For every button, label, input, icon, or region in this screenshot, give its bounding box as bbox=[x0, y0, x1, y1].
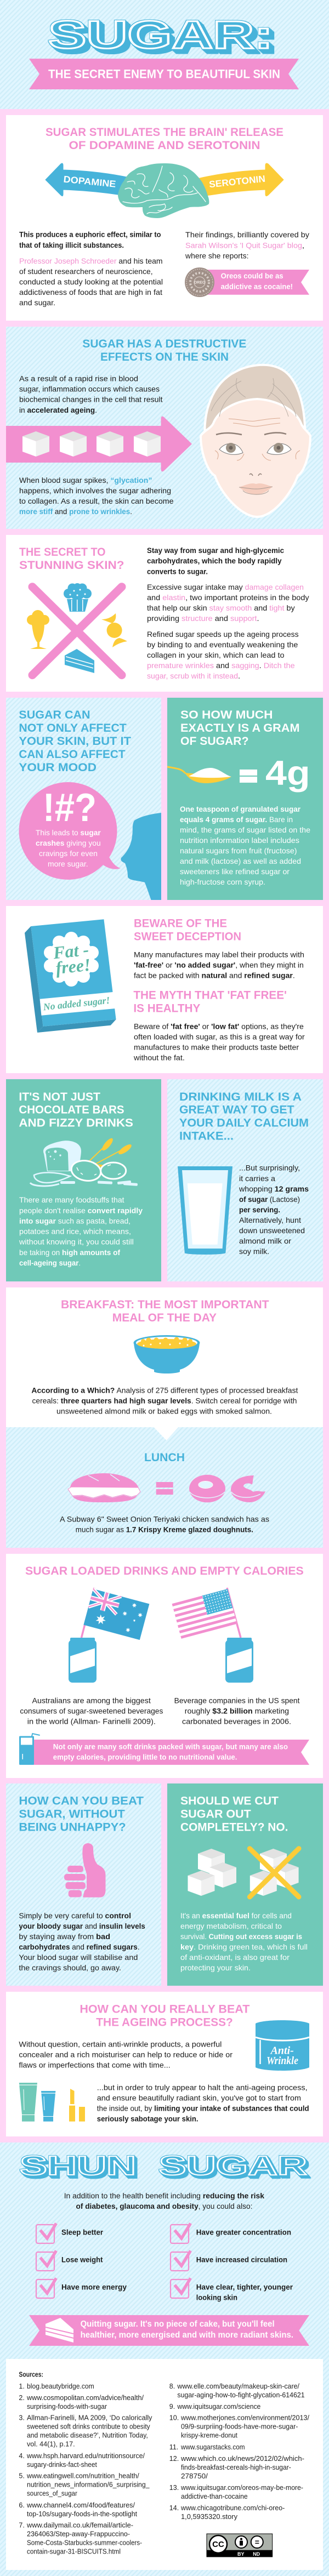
text block: beverage companies: Beverage companies in the US spent bbox=[174, 1696, 300, 1705]
panel: brain release bbox=[6, 115, 323, 321]
heading: CAN ALSO AFFECT bbox=[19, 748, 126, 761]
heading: YOUR SKIN, BUT IT bbox=[19, 735, 131, 748]
badge: creative commons bbox=[207, 2534, 273, 2557]
list: sources right: 12. bbox=[169, 2455, 179, 2463]
text block bbox=[19, 1911, 145, 1972]
callout: oreos: addictive as cocaine! bbox=[221, 282, 293, 291]
text block: fact be packed with natural and refined sugar. bbox=[134, 971, 295, 980]
heading: GREAT WAY TO GET bbox=[179, 1104, 294, 1116]
list: sources left: top-10s/sugary-foods-in-the-spotlight bbox=[27, 2510, 138, 2518]
heading: OF DOPAMINE AND SEROTONIN bbox=[69, 139, 260, 152]
heading: SHOULD WE CUT bbox=[180, 1794, 279, 1807]
heading: MEAL OF THE DAY bbox=[112, 1312, 217, 1324]
list: sources left: www.eatingwell.com/nutrition_health/ bbox=[26, 2472, 139, 2480]
list: sources left: 6. bbox=[19, 2501, 25, 2509]
text block: left: addictiveness of foods that are high in fat bbox=[19, 288, 162, 297]
icon: fat free box: Fat - bbox=[52, 939, 90, 962]
text block bbox=[97, 2083, 309, 2123]
text block: collagen in your skin, which can lead to bbox=[147, 651, 285, 659]
panel: drinking milk bbox=[167, 1079, 323, 1281]
text block: beverage companies bbox=[174, 1696, 300, 1725]
heading bbox=[133, 989, 287, 1015]
checklist: right bbox=[171, 2223, 293, 2302]
list: sources left: 2. bbox=[19, 2394, 25, 2402]
icon: spoon of sugar bbox=[167, 767, 231, 783]
text block: to collagen. As a result, the skin can become bbox=[19, 497, 174, 505]
text block: beverage companies: carbonated beverages in 2006. bbox=[182, 1717, 291, 1725]
text block: the inside out, by limiting your intake of substances that could bbox=[97, 2104, 309, 2113]
callout: oreos: OREO bbox=[194, 281, 206, 285]
text block: carbohydrates, which the body rapidly bbox=[147, 556, 282, 565]
panel: gram of sugar bbox=[167, 698, 323, 900]
text block bbox=[239, 1164, 309, 1256]
icon: sugar cubes bbox=[188, 1849, 236, 1896]
banner: quitting sugar: healthier, more energised and with more radiant skins. bbox=[81, 2330, 293, 2340]
heading bbox=[46, 126, 283, 152]
text block: left: Professor Joseph Schroeder and his team bbox=[19, 257, 163, 265]
list: sources right: 09/9-surpriing-foods-have-more-sugar- bbox=[181, 2423, 298, 2431]
text block bbox=[180, 805, 310, 886]
text block: carbohydrates and refined sugars. bbox=[19, 1942, 140, 1951]
text block bbox=[19, 1195, 143, 1267]
panel: mood bbox=[6, 698, 161, 900]
heading: IT'S NOT JUST bbox=[19, 1091, 100, 1103]
text block bbox=[133, 1022, 305, 1062]
text block: in accelerated ageing. bbox=[19, 406, 97, 414]
heading bbox=[19, 1794, 144, 1833]
text block: nutrition information label includes bbox=[180, 836, 299, 845]
arrow: serotonin: SEROTONIN bbox=[208, 174, 266, 190]
list: sources right: sugar-aging-how-to-fight-glycation-614621 bbox=[177, 2391, 305, 2399]
list: sources left: 3. bbox=[19, 2414, 25, 2422]
heading: EXACTLY IS A GRAM bbox=[180, 722, 299, 734]
heading: COMPLETELY? NO. bbox=[180, 1821, 288, 1833]
list: sources left: www.hsph.harvard.edu/nutritionsource/ bbox=[26, 2452, 145, 2460]
text block: of sugar (Lactose) bbox=[239, 1195, 300, 1204]
banner: subtitle: THE SECRET ENEMY TO BEAUTIFUL SKIN bbox=[48, 67, 280, 81]
text block: premature wrinkles and sagging. Ditch the bbox=[147, 661, 295, 670]
arrow: serotonin bbox=[197, 163, 283, 196]
checklist: left bbox=[36, 2223, 127, 2298]
icon: bread, potatoes and pasta bbox=[30, 1137, 138, 1186]
text block: sugar, inflammation occurs which causes bbox=[19, 385, 160, 394]
text block: left: conducted a study looking at the potential bbox=[19, 277, 163, 286]
list: sources right: finds-breakfast-cereals-high-in-sugar- bbox=[181, 2464, 291, 2471]
list: sources left: 4. bbox=[19, 2452, 25, 2460]
text block: unsweetened almond milk or baked eggs with smoked salmon. bbox=[56, 1407, 272, 1416]
list: sources left: sugary-drinks-fact-sheet bbox=[27, 2461, 97, 2469]
icon: crossed out sweets bbox=[27, 583, 127, 675]
list: sources right: www.sugarstacks.com bbox=[180, 2443, 245, 2451]
icon: crossed sugar cubes bbox=[249, 1849, 299, 1897]
callout: oreos bbox=[185, 267, 309, 297]
text block: sugar, scrub with it instead. bbox=[147, 671, 240, 680]
text block: per serving. bbox=[239, 1205, 280, 1214]
list: sources right bbox=[169, 2383, 310, 2521]
text block: be taking on high amounts of bbox=[19, 1248, 120, 1257]
section: shun sugar bbox=[20, 2151, 309, 2346]
list: sources right: www.chicagotribune.com/chi-oreo- bbox=[180, 2504, 285, 2512]
list: sources left: surprising-foods-with-sugar bbox=[27, 2403, 107, 2410]
heading: LUNCH bbox=[144, 1451, 185, 1464]
text block: Simply be very careful to control bbox=[19, 1911, 131, 1920]
list: sources left: www.cosmopolitan.com/advice/health/ bbox=[26, 2394, 144, 2402]
heading: SUGAR LOADED DRINKS AND EMPTY CALORIES bbox=[25, 1565, 304, 1577]
arrow: dopamine: DOPAMINE bbox=[63, 174, 116, 190]
list: sources right: 9. bbox=[169, 2403, 175, 2410]
heading: BEWARE OF THE bbox=[134, 917, 227, 930]
speech bubble bbox=[19, 782, 121, 880]
text block: much sugar as 1.7 Krispy Kreme glazed doughnuts. bbox=[76, 1525, 253, 1534]
heading: HOW CAN YOU REALLY BEAT bbox=[80, 2003, 250, 2015]
callout: empty calories bbox=[19, 1734, 309, 1765]
text block: Australians bbox=[20, 1696, 163, 1725]
banner: quitting sugar bbox=[29, 2315, 309, 2346]
list: sources left: Allman-Farinelli, MA 2009, ‘Do calorically bbox=[27, 2414, 152, 2422]
badge: creative commons: ND bbox=[253, 2551, 260, 2557]
text block: Australians: consumers of sugar-sweetened beverages bbox=[20, 1706, 163, 1715]
heading bbox=[82, 338, 246, 363]
icon: sandwich bbox=[68, 1473, 140, 1502]
text block: Without question, certain anti-wrinkle products, a powerful bbox=[19, 2039, 222, 2048]
list: sources right: www.iquitsugar.com/oreos-may-be-more- bbox=[180, 2484, 303, 2492]
icon: fat free box: free! bbox=[55, 955, 92, 978]
list: sources left: Some-Costa-Starbucks-summer-coolers- bbox=[27, 2539, 142, 2547]
panel: not just chocolate bbox=[6, 1079, 161, 1281]
banner: subtitle bbox=[29, 59, 299, 89]
checklist: left: Have more energy bbox=[61, 2283, 127, 2292]
text block: by staying away from bad bbox=[19, 1932, 110, 1941]
icon: can with US flag bbox=[172, 1588, 253, 1683]
text block: left bbox=[19, 230, 163, 307]
list: sources left: 5. bbox=[19, 2472, 25, 2480]
text block: natural sugars from fruit (fructose) bbox=[180, 846, 297, 855]
list: sources left: nutrition_news_information/6_surprising_ bbox=[27, 2481, 150, 2489]
heading: SUGAR OUT bbox=[180, 1808, 251, 1820]
text block bbox=[31, 1386, 298, 1416]
heading: YOUR MOOD bbox=[19, 761, 97, 774]
heading: SUGAR STIMULATES THE BRAIN' RELEASE bbox=[46, 126, 283, 139]
text block bbox=[19, 374, 163, 414]
speech bubble: This leads to sugar bbox=[36, 828, 101, 837]
heading: THE MYTH THAT 'FAT FREE' bbox=[133, 989, 287, 1002]
heading bbox=[19, 1091, 133, 1130]
checklist: right: Have increased circulation bbox=[196, 2255, 287, 2264]
text block bbox=[147, 546, 309, 680]
text block: A Subway 6" Sweet Onion Teriyaki chicken sandwich has as bbox=[60, 1515, 269, 1524]
list: sources right: 13. bbox=[169, 2484, 179, 2492]
heading: BEING UNHAPPY? bbox=[19, 1821, 126, 1833]
text block: key. Drinking green tea, which is full bbox=[180, 1942, 308, 1951]
callout: empty calories: Not only are many soft drinks packed with sugar, but many are also bbox=[53, 1742, 288, 1751]
heading: INTAKE... bbox=[179, 1130, 234, 1143]
icon: fat free box: No added sugar! bbox=[42, 995, 110, 1012]
list: sources left: blog.beautybridge.com bbox=[27, 2383, 94, 2390]
text block: and elastin, two important proteins in the body bbox=[147, 593, 309, 602]
icon: can with Australian flag bbox=[69, 1588, 149, 1683]
list: sources left: 2364063/Step-away-Frappuccino- bbox=[27, 2531, 130, 2538]
text block: Many manufactures may label their products with bbox=[134, 950, 304, 959]
text block: potatoes and rice, which means, bbox=[19, 1227, 131, 1236]
heading: OF SUGAR? bbox=[180, 735, 249, 748]
arrow: dopamine bbox=[46, 163, 129, 196]
speech bubble: crashes giving you bbox=[36, 839, 101, 847]
panel: beat sugar bbox=[6, 1783, 161, 1986]
text block: often loaded with sugar, as this is a great way for bbox=[134, 1033, 305, 1041]
text block: Your blood sugar will stabilise and bbox=[19, 1953, 138, 1962]
text block: right: Sarah Wilson's 'I Quit Sugar' blog , bbox=[185, 241, 304, 250]
icon: thumbs up bbox=[64, 1843, 105, 1897]
text block: left: This produces a euphoric effect, similar to bbox=[19, 230, 161, 239]
text block: high-fructose corn syrup. bbox=[180, 877, 265, 886]
heading: DRINKING MILK IS A bbox=[179, 1091, 302, 1103]
speech bubble: !#? bbox=[43, 786, 97, 830]
title: SHUN SUGAR bbox=[20, 2151, 307, 2181]
heading: NOT ONLY AFFECT bbox=[19, 722, 127, 734]
text block: your bloody sugar and insulin levels bbox=[19, 1922, 145, 1930]
text block: equals 4 grams of sugar. Bare in bbox=[180, 815, 293, 824]
equals bbox=[156, 1482, 173, 1495]
text block: of anti-oxidant, is also great for bbox=[180, 1953, 290, 1962]
text block: without the fat. bbox=[133, 1053, 185, 1062]
stat: 4g: 4g bbox=[265, 754, 310, 793]
text block bbox=[64, 2191, 264, 2210]
heading bbox=[80, 2003, 250, 2028]
text block: down unsweetened bbox=[239, 1226, 305, 1235]
heading: SUGAR CAN bbox=[19, 709, 90, 721]
text block: mind, the grams of sugar listed on the bbox=[180, 825, 310, 834]
text block: converts to sugar. bbox=[147, 567, 208, 576]
heading: SUGAR HAS A DESTRUCTIVE bbox=[82, 338, 246, 350]
text block bbox=[19, 2039, 232, 2069]
text block: right: Their findings, brilliantly covered by bbox=[185, 230, 309, 239]
text block: beverage companies: roughly $3.2 billion marketing bbox=[185, 1706, 289, 1715]
text block: Beware of 'fat free' or 'low fat' options, as they're bbox=[134, 1022, 304, 1031]
icon: glass of milk bbox=[178, 1166, 232, 1255]
text block: concealer and a rich moisturiser can help to reduce or hide or bbox=[19, 2050, 232, 2059]
panel: stunning skin bbox=[6, 535, 323, 692]
heading: CHOCOLATE BARS bbox=[19, 1104, 124, 1116]
heading bbox=[179, 1091, 309, 1143]
panel: lunch bbox=[6, 1427, 323, 1548]
text block: happens, which involves the sugar adhering bbox=[19, 486, 171, 495]
heading bbox=[180, 709, 299, 748]
icon: cosmetic tubes bbox=[19, 2083, 85, 2122]
heading: SWEET DECEPTION bbox=[134, 931, 241, 943]
text block: Alternatively, hunt bbox=[239, 1216, 301, 1224]
text block: right bbox=[185, 230, 309, 260]
list: sources left: contain-sugar-31-BISCUITS.html bbox=[27, 2548, 121, 2556]
text block: right: where she reports: bbox=[185, 252, 249, 260]
heading bbox=[19, 546, 124, 572]
heading: THE AGEING PROCESS? bbox=[96, 2016, 233, 2028]
text block: According to a Which? Analysis of 275 different types of processed breakfast bbox=[31, 1386, 298, 1395]
text block: the cravings should, go away. bbox=[19, 1963, 121, 1972]
text block: Refined sugar speeds up the ageing process bbox=[147, 630, 299, 639]
text block: Australians: in the world (Allman- Farinelli 2009). bbox=[27, 1717, 156, 1725]
heading: YOUR DAILY CALCIUM bbox=[179, 1117, 309, 1130]
list: sources left: www.dailymail.co.uk/femail/article- bbox=[26, 2522, 133, 2529]
badge: creative commons: = bbox=[255, 2538, 259, 2546]
panel: breakfast bbox=[6, 1287, 323, 1427]
heading: EFFECTS ON THE SKIN bbox=[100, 351, 229, 363]
list: sources left: sweetened soft drinks contribute to obesity bbox=[27, 2423, 150, 2431]
list: sources right: 1,0,5935320.story bbox=[181, 2513, 238, 2521]
illustration: ageing face bbox=[201, 365, 310, 517]
text block: Australians: Australians are among the biggest bbox=[32, 1696, 151, 1705]
list: sources right: 10. bbox=[169, 2414, 179, 2422]
text block: There are many foodstuffs that bbox=[19, 1195, 124, 1204]
checklist: right: looking skin bbox=[196, 2293, 237, 2302]
text block: of diabetes, glaucoma and obesity, you could also: bbox=[76, 2202, 252, 2210]
heading: STUNNING SKIN? bbox=[19, 559, 124, 572]
list: sources left: 1. bbox=[19, 2383, 25, 2390]
list: sources right: 14. bbox=[169, 2504, 179, 2512]
heading: AND FIZZY DRINKS bbox=[19, 1117, 133, 1130]
heading: SUGAR, WITHOUT bbox=[19, 1808, 125, 1820]
text block: whopping 12 grams bbox=[239, 1184, 309, 1193]
list: sources right: www.iquitsugar.com/science bbox=[177, 2403, 260, 2410]
list: sources left: vol. 44(1), p.17. bbox=[27, 2441, 75, 2448]
text block: providing structure and support. bbox=[147, 614, 259, 623]
list: sources right: www.which.co.uk/news/2012/02/which- bbox=[180, 2455, 304, 2463]
text block: without knowing it, you could still bbox=[19, 1238, 134, 1246]
text block bbox=[180, 1911, 308, 1972]
list: sources right: krispy-kreme-donut bbox=[181, 2432, 237, 2440]
list: sources right: addictive-than-cocaine bbox=[181, 2493, 248, 2500]
text block: seriously sabotage your skin. bbox=[97, 2115, 198, 2123]
icon: doughnuts bbox=[189, 1475, 265, 1502]
text block: In addition to the health benefit including reducing the risk bbox=[64, 2191, 264, 2200]
checklist: left: Lose weight bbox=[61, 2255, 103, 2264]
list: sources left: and metabolic disease?’, Nutrition Today, bbox=[27, 2432, 148, 2440]
heading: SO HOW MUCH bbox=[180, 709, 273, 721]
list: sources right: www.elle.com/beauty/makeup-skin-care/ bbox=[177, 2383, 300, 2390]
text block bbox=[60, 1515, 269, 1534]
panel: sweet deception bbox=[6, 906, 323, 1073]
text block: manufactures to make their products taste better bbox=[134, 1043, 299, 1052]
list: sources right: 11. bbox=[169, 2443, 178, 2451]
text block: sweeteners like refined sugar or bbox=[180, 867, 290, 876]
panel: destructive effects bbox=[6, 327, 323, 529]
heading bbox=[180, 1794, 288, 1833]
text block: almond milk or bbox=[239, 1236, 291, 1245]
text block: left: that of taking illicit substances. bbox=[19, 241, 124, 249]
list: sources right: www.motherjones.com/environment/2013/ bbox=[180, 2414, 310, 2422]
text block: into sugar such as pasta, bread, bbox=[19, 1217, 131, 1226]
text block: it carries a bbox=[239, 1174, 275, 1183]
text block: 'fat-free' or 'no added sugar', when they might in bbox=[134, 961, 304, 970]
title: SUGAR: bbox=[48, 14, 273, 57]
text block: that help our skin stay smooth and tight by bbox=[147, 603, 295, 612]
text block: ...but in order to truly appear to halt the anti-ageing process, bbox=[97, 2083, 308, 2092]
text block: more stiff and prone to wrinkles. bbox=[19, 507, 132, 516]
list: sources left: www.channel4.com/4food/features/ bbox=[26, 2501, 135, 2509]
text block: and milk (lactose) as well as added bbox=[180, 857, 301, 865]
header bbox=[29, 14, 299, 89]
speech bubble: cravings for even bbox=[39, 849, 98, 858]
icon: cereal bowl bbox=[134, 1335, 200, 1374]
text block: cereals: three quarters had high sugar levels. Switch cereal for porridge with bbox=[32, 1397, 297, 1405]
list: sources right: 278750/ bbox=[181, 2472, 208, 2480]
text block: Stay way from sugar and high-glycemic bbox=[147, 546, 284, 555]
list: sources left: sources_of_sugar bbox=[27, 2490, 77, 2498]
text block: people don't realise convert rapidly bbox=[19, 1206, 143, 1215]
panel: ageing process bbox=[6, 1992, 323, 2136]
text block: left: of student researchers of neuroscience, bbox=[19, 267, 153, 276]
heading bbox=[134, 917, 241, 943]
icon: fat free box bbox=[25, 919, 116, 1033]
heading bbox=[61, 1298, 269, 1324]
heading bbox=[19, 709, 131, 774]
equals bbox=[240, 770, 257, 783]
arrow with sugar cubes bbox=[6, 417, 192, 471]
text block: and ensure beautifully radiant skin, you've got to start from bbox=[97, 2094, 301, 2102]
callout: empty calories: empty calories, providing little to no nutritional value. bbox=[53, 1753, 237, 1762]
list: sources left bbox=[19, 2383, 152, 2556]
text block: left: and sugar. bbox=[19, 298, 55, 307]
panel: cut sugar out bbox=[167, 1783, 323, 1986]
callout: oreos: Oreos could be as bbox=[221, 271, 283, 280]
icon: anti-wrinkle jar bbox=[256, 2020, 309, 2071]
text block bbox=[134, 950, 304, 980]
text block bbox=[19, 476, 174, 516]
text block: flaws or imperfections that come with time... bbox=[19, 2060, 171, 2069]
checklist: right: Have clear, tighter, younger bbox=[196, 2283, 293, 2292]
heading: IS HEALTHY bbox=[133, 1002, 200, 1015]
heading: HOW CAN YOU BEAT bbox=[19, 1794, 144, 1807]
heading: THE SECRET TO bbox=[19, 546, 105, 558]
list: sources right: 8. bbox=[169, 2383, 175, 2390]
icon: anti-wrinkle jar: Wrinkle bbox=[266, 2055, 298, 2067]
badge: creative commons: CC bbox=[212, 2540, 224, 2549]
text block: survival. Cutting out excess sugar is bbox=[180, 1932, 302, 1941]
text block: As a result of a rapid rise in blood bbox=[19, 374, 138, 383]
text block: energy metabolism, critical to bbox=[180, 1922, 282, 1930]
heading: Sources: bbox=[19, 2371, 43, 2379]
checklist: right: Have greater concentration bbox=[196, 2228, 291, 2237]
text block: soy milk. bbox=[239, 1247, 269, 1256]
icon: head silhouette bbox=[121, 813, 161, 900]
text block: ...But surprisingly, bbox=[239, 1164, 300, 1172]
panel: sources bbox=[6, 2359, 323, 2570]
panel: sugar loaded drinks bbox=[6, 1554, 323, 1778]
text block: cell-ageing sugar. bbox=[19, 1258, 81, 1267]
banner: quitting sugar: Quitting sugar. It's no piece of cake, but you'll feel bbox=[81, 2319, 275, 2329]
text block: protecting your skin. bbox=[180, 1963, 251, 1972]
heading: BREAKFAST: THE MOST IMPORTANT bbox=[61, 1298, 269, 1311]
icon: anti-wrinkle jar: Anti- bbox=[270, 2045, 294, 2057]
list: sources left: 7. bbox=[19, 2522, 25, 2529]
text block: One teaspoon of granulated sugar bbox=[180, 805, 301, 813]
icon: brain bbox=[118, 163, 209, 218]
speech bubble: more sugar. bbox=[48, 859, 88, 868]
text block: biochemical changes in the cell that result bbox=[19, 395, 163, 404]
text block: It's an essential fuel for cells and bbox=[180, 1911, 292, 1920]
text block: by binding to and eventually weakening the bbox=[147, 640, 298, 649]
text block: When blood sugar spikes, “glycation” bbox=[19, 476, 152, 485]
text block: Excessive sugar intake may damage collagen bbox=[147, 583, 304, 591]
checklist: left: Sleep better bbox=[61, 2228, 104, 2237]
badge: creative commons: BY bbox=[237, 2551, 245, 2557]
